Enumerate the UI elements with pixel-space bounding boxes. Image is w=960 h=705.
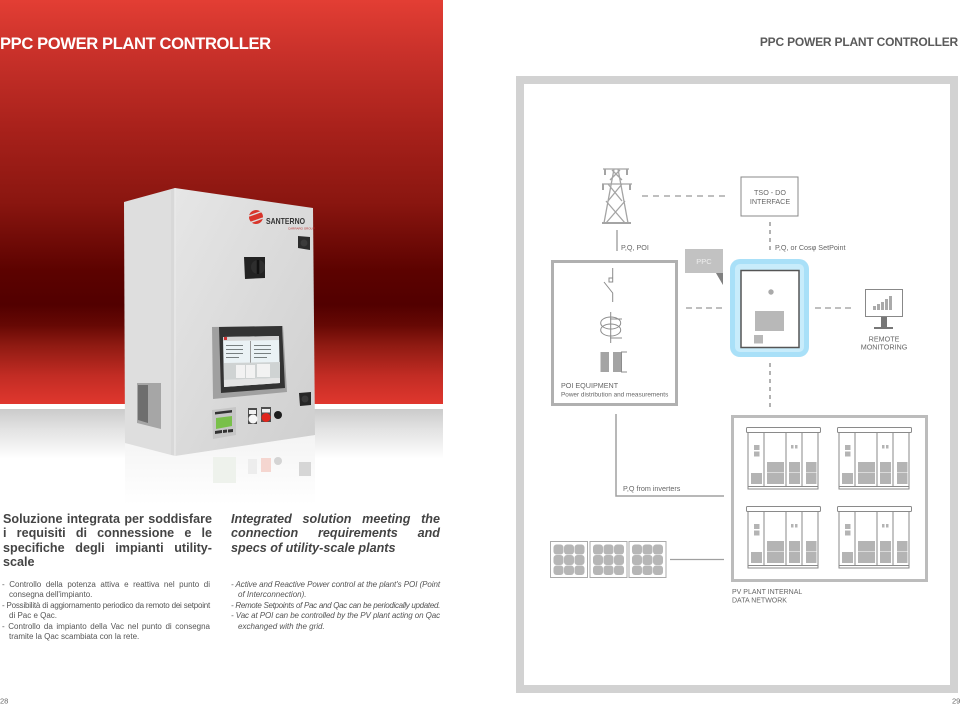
text block: Italian bullets: - Controllo della potenza attiva e reattiva nel punto di bbox=[2, 580, 210, 589]
dashed link: POI to PPC bbox=[686, 307, 725, 309]
POI caption bbox=[561, 381, 668, 398]
heading: Italian: scale bbox=[3, 555, 35, 569]
label: setpoint: P,Q, or Cosφ SetPoint bbox=[775, 243, 845, 252]
display keypad bbox=[212, 407, 236, 439]
heading: English: connection requirements and bbox=[231, 526, 440, 540]
dashed link: PPC to monitoring bbox=[815, 307, 855, 309]
POI caption: Power distribution and measurements bbox=[561, 392, 668, 398]
icon: current transformer bbox=[601, 312, 622, 343]
panel: PV plant internal network bbox=[732, 416, 926, 580]
text block: Italian bullets: di Pac e Qac. bbox=[9, 611, 57, 620]
label: PV plant internal data network: PV PLANT INTERNAL bbox=[732, 589, 802, 596]
label: P,Q, POI: P,Q, POI bbox=[621, 243, 649, 252]
diagram outer frame bbox=[520, 80, 954, 689]
heading: Italian: specifiche degli impianti utility- bbox=[3, 541, 212, 555]
red background band bbox=[0, 0, 443, 404]
ventilation grille bbox=[137, 383, 161, 429]
TSO interface box: INTERFACE bbox=[750, 197, 790, 206]
heading: Italian: Soluzione integrata per soddisfare bbox=[3, 512, 212, 526]
text block: English bullets: - Remote Setpoints of Pac and Qac can be periodically updated. bbox=[231, 601, 440, 610]
text block: Italian bullets: consegna dell'impianto. bbox=[9, 590, 92, 599]
text block: English bullets: of Interconnection). bbox=[238, 590, 306, 599]
icon: switch bbox=[604, 268, 613, 302]
text block: English bullets: - Active and Reactive Power control at the plant's POI (Point bbox=[231, 580, 440, 589]
inverter cabinet 3 bbox=[746, 506, 820, 568]
inverter cabinet 4 bbox=[838, 506, 912, 568]
cabinet left side bbox=[124, 188, 175, 456]
text block: Italian bullets bbox=[2, 580, 210, 641]
heading: Italian: i requisiti di connessione e le bbox=[3, 526, 212, 540]
title: right page: PPC POWER PLANT CONTROLLER bbox=[760, 35, 958, 49]
icon: remote monitoring screen bbox=[866, 290, 902, 329]
label: P,Q from inverters: P,Q from inverters bbox=[623, 484, 681, 493]
text block: Italian bullets: - Controllo da impianto della Vac nel punto di consegna bbox=[2, 622, 210, 631]
solid link: inverters to POI bbox=[616, 414, 724, 496]
logo bbox=[249, 210, 315, 230]
text block: English bullets bbox=[231, 580, 440, 631]
label: remote monitoring bbox=[861, 334, 908, 352]
solid link: tower to POI bbox=[616, 230, 618, 251]
label: remote monitoring: MONITORING bbox=[861, 342, 908, 352]
POI caption: POI EQUIPMENT bbox=[561, 381, 619, 390]
TSO interface box bbox=[741, 177, 798, 216]
title: left page: PPC POWER PLANT CONTROLLER bbox=[0, 34, 271, 53]
text block: Italian bullets: - Possibilità di aggiornamento periodico da remoto dei setpoint bbox=[2, 601, 210, 610]
callout: PPC: PPC bbox=[696, 257, 712, 266]
dashed link: PPC to inverters bbox=[769, 363, 771, 410]
lower right socket bbox=[299, 392, 311, 406]
inverter cabinet 2 bbox=[838, 428, 912, 489]
push buttons bbox=[248, 407, 282, 424]
rotary switch bbox=[244, 257, 265, 279]
label: PV plant internal data network bbox=[732, 589, 802, 604]
text block: Italian bullets: tramite la Qac scambiata con la rete. bbox=[9, 632, 139, 641]
top right socket bbox=[298, 236, 310, 250]
label: PV plant internal data network: DATA NETWORK bbox=[732, 598, 787, 604]
panel: POI equipment bbox=[552, 262, 676, 404]
label: remote monitoring: REMOTE bbox=[869, 334, 900, 344]
icon: photovoltaic panels bbox=[550, 542, 666, 578]
cabinet front bbox=[175, 188, 315, 456]
dashed link: TSO to PPC bbox=[769, 222, 771, 252]
heading: English: Integrated solution meeting the bbox=[231, 512, 440, 526]
floor reflection band bbox=[0, 409, 443, 459]
text block: English bullets: - Vac at POI can be controlled by the PV plant acting on Qac bbox=[231, 611, 440, 620]
heading: Italian bbox=[3, 512, 212, 569]
dashed link: tower to TSO bbox=[642, 195, 730, 197]
touch panel bbox=[212, 326, 287, 399]
callout: PPC bbox=[685, 249, 723, 285]
solid link: panels to inverters bbox=[670, 558, 724, 560]
logo: SANTERNO bbox=[266, 216, 305, 226]
product photo: PPC cabinet bbox=[124, 188, 315, 505]
heading: English: specs of utility-scale plants bbox=[231, 541, 395, 555]
PPC unit highlighted bbox=[730, 259, 809, 357]
TSO interface box: TSO - DO bbox=[754, 188, 786, 197]
text block: English bullets: exchanged with the grid. bbox=[238, 622, 325, 631]
inverter cabinet 1 bbox=[746, 428, 820, 489]
logo: CARRARO GROUP bbox=[288, 226, 315, 230]
icon: transmission tower bbox=[602, 169, 632, 223]
heading: English bbox=[231, 512, 440, 555]
cabinet reflection bbox=[125, 435, 315, 505]
icon: voltage transformer bbox=[600, 352, 627, 372]
